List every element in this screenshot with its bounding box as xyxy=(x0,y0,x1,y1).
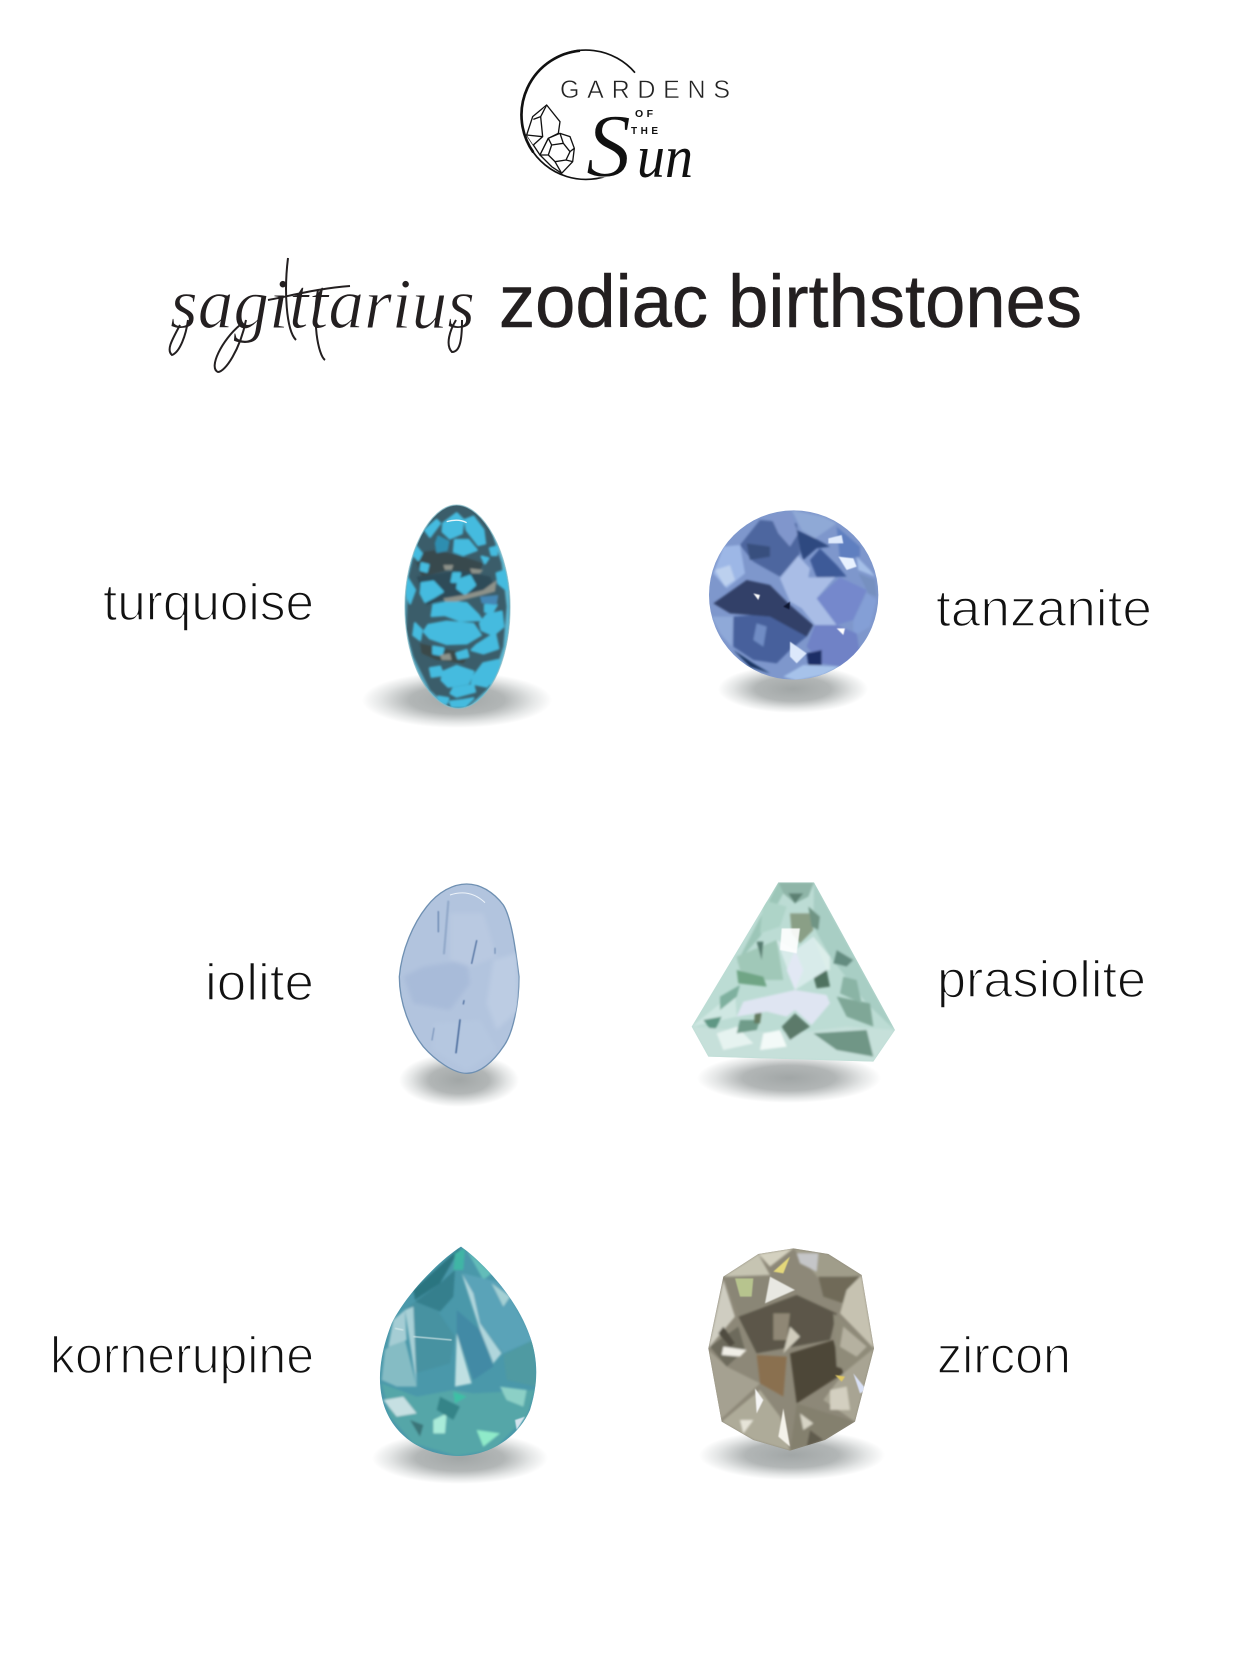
label: turquoise: turquoise xyxy=(103,574,314,632)
gem: zircon xyxy=(699,1248,885,1480)
shadow xyxy=(399,1053,519,1107)
logo text: THE: THE xyxy=(631,126,658,137)
logo text: GARDENS: GARDENS xyxy=(560,76,730,104)
title script word: sagittarius: sagittarius xyxy=(170,264,475,344)
gem: turquoise xyxy=(362,500,552,728)
title text: zodiac birthstones: zodiac birthstones xyxy=(499,260,1082,343)
label: prasiolite: prasiolite xyxy=(937,951,1146,1009)
logo: Gardens of the Sun xyxy=(521,50,730,196)
label: iolite: iolite xyxy=(205,954,314,1012)
label: tanzanite: tanzanite xyxy=(936,580,1152,638)
logo text: OF: OF xyxy=(635,108,654,120)
shadow xyxy=(699,1430,885,1480)
shadow xyxy=(362,672,552,728)
logo script: Sun: S xyxy=(586,97,631,196)
label: zircon: zircon xyxy=(937,1327,1071,1385)
shadow xyxy=(697,1053,881,1103)
gem: kornerupine xyxy=(372,1247,548,1484)
logo ring xyxy=(521,50,635,179)
gem: prasiolite xyxy=(692,882,895,1103)
gem: tanzanite xyxy=(709,510,878,713)
logo crystals icon xyxy=(527,105,574,173)
label: kornerupine: kornerupine xyxy=(50,1327,314,1385)
logo script: Sun: un xyxy=(637,124,693,190)
shadow xyxy=(372,1432,548,1484)
title xyxy=(170,258,1082,372)
logo script: Sun xyxy=(586,97,693,196)
shadow xyxy=(718,665,868,713)
gem: iolite xyxy=(399,884,519,1107)
title script word: sagittarius xyxy=(170,258,475,372)
